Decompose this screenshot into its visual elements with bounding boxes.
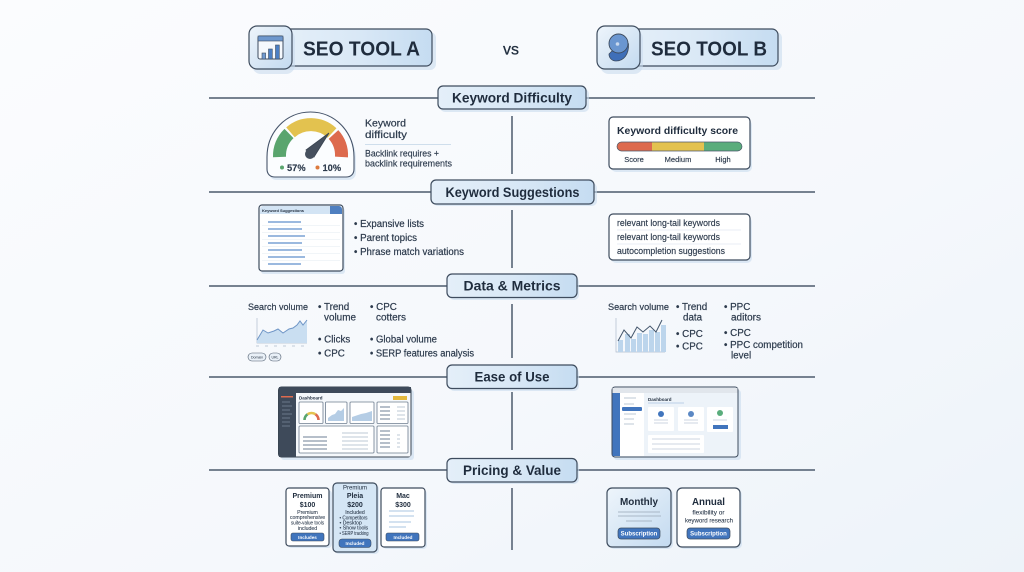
heading: Data & Metrics <box>447 274 579 300</box>
label: SEO TOOL A <box>303 38 420 60</box>
card: Plete <box>333 483 379 554</box>
card: Mac: $300 <box>395 502 411 509</box>
metric lists: • PPC competition <box>724 340 803 351</box>
metric lists: volume <box>324 312 357 324</box>
panel: tool B difficulty score: Score <box>624 155 644 164</box>
card: Premium: Premium <box>297 510 318 516</box>
card: Annual: Subscription <box>690 532 727 538</box>
list: tool A suggestions: • Parent topics <box>354 233 417 244</box>
card: Monthly: Monthly <box>620 496 658 508</box>
gauge <box>267 112 356 180</box>
card: Plete: Included <box>346 541 365 546</box>
panel: tool B difficulty score <box>609 117 752 172</box>
metric lists <box>676 302 803 362</box>
gauge: 57% <box>287 163 306 173</box>
metric lists: • Clicks <box>318 334 350 346</box>
list: tool A suggestions <box>354 219 464 258</box>
heading: Keyword Suggestions: Keyword Suggestions <box>446 184 580 200</box>
panel: tool B suggestions list: relevant long-tail keywords <box>617 218 720 228</box>
card: Monthly <box>607 488 673 549</box>
icon: nine shaped logo <box>609 34 629 61</box>
panel: tool B suggestions list <box>609 214 752 263</box>
widgets <box>299 402 408 453</box>
card: Premium <box>286 488 332 548</box>
panel: tool A keyword suggestions list: Keyword Suggestions <box>262 208 305 213</box>
card: Annual <box>677 488 742 549</box>
metric lists: • Global volume <box>370 334 438 346</box>
metric tags: URL <box>271 356 279 360</box>
metric lists: • CPC <box>676 329 703 340</box>
metric lists: • CPC <box>676 342 703 352</box>
metric lists: • CPC <box>724 328 751 339</box>
metric tags: Domain <box>251 356 263 360</box>
panel: tool A gauge <box>267 112 452 180</box>
panel: tool B difficulty score: Keyword difficulty score <box>617 125 738 137</box>
center divider <box>511 116 513 550</box>
panel: tool A keyword suggestions list <box>259 205 345 274</box>
gauge widget <box>304 413 318 420</box>
metric lists: • PPC <box>724 302 750 313</box>
card: Premium: comprehensive <box>290 515 325 521</box>
gauge notes: backlink requirements <box>365 158 452 168</box>
section rules <box>209 98 815 470</box>
metric lists: cotters <box>376 312 406 324</box>
panel: tool B suggestions list: autocompletion suggestions <box>617 246 725 256</box>
gauge notes: difficulty <box>365 130 407 141</box>
card: Mac: Mac <box>396 493 410 500</box>
header: SEO Tool B <box>597 26 782 74</box>
heading: Keyword Suggestions <box>431 180 597 206</box>
metric lists: • SERP features analysis <box>370 348 474 360</box>
metric lists: • Trend <box>676 302 707 313</box>
card: Premium: Premium <box>293 493 322 500</box>
card: Plete: Included <box>345 510 365 516</box>
score bar <box>617 142 742 151</box>
heading: Keyword Difficulty: Keyword Difficulty <box>452 90 572 106</box>
heading: Data & Metrics: Data & Metrics <box>464 278 561 294</box>
cards <box>648 407 733 453</box>
card: Annual: keyword research <box>685 518 733 524</box>
panel: tool A data and metrics: Search volume <box>248 302 308 313</box>
heading: Pricing & Value: Pricing & Value <box>463 462 561 478</box>
panel: tool B suggestions list: relevant long-tail keywords <box>617 232 720 242</box>
card: Premium: suite-value tools <box>291 520 324 526</box>
area chart <box>256 318 307 346</box>
card: Plete: Pleia <box>347 493 363 500</box>
list: tool A suggestions: • Phrase match variations <box>354 247 464 258</box>
gauge notes: Keyword <box>365 118 406 130</box>
combo chart <box>616 318 666 352</box>
card: Annual: Annual <box>692 496 725 508</box>
metric tags <box>248 353 281 361</box>
vs: vs <box>503 42 519 58</box>
heading: Ease of Use <box>447 365 579 391</box>
heading: Ease of Use: Ease of Use <box>474 368 550 384</box>
card: Plete: Premium <box>343 486 367 492</box>
gauge notes: Backlink requires + <box>365 148 439 158</box>
panel: tool B dashboard screenshot <box>612 387 741 460</box>
panel: tool A dashboard screenshot <box>278 387 414 460</box>
card: Plete: • Show tools <box>340 526 369 532</box>
metric lists: data <box>683 312 703 324</box>
icon: dashboard bars <box>258 36 283 59</box>
panel: tool B dashboard screenshot: Dashboard <box>648 397 672 402</box>
card: Premium: Includes <box>298 535 317 540</box>
panel: tool A data and metrics <box>248 302 474 361</box>
card: Premium: $100 <box>300 502 315 509</box>
header: SEO Tool A <box>249 26 436 74</box>
metric lists: • CPC <box>318 348 345 360</box>
metric lists: • Trend <box>318 302 349 313</box>
card: Plete: • SERP tracking <box>340 531 369 537</box>
card: Mac <box>381 488 427 549</box>
label: SEO TOOL B <box>651 38 767 60</box>
metric lists <box>318 302 474 360</box>
heading: Pricing & Value <box>447 458 579 484</box>
card: Monthly: Subscription <box>621 532 658 538</box>
card: Premium: included <box>298 526 317 532</box>
panel: tool B difficulty score: Medium <box>665 155 691 164</box>
gauge: 10% <box>322 163 342 173</box>
card: Plete: $200 <box>347 502 363 509</box>
metric lists: level <box>731 350 751 362</box>
card: Annual: flexibility or <box>692 510 725 516</box>
card: Plete: • Desktop <box>340 520 362 526</box>
list rows <box>268 222 305 264</box>
gauge notes <box>365 118 452 168</box>
list: tool A suggestions: • Expansive lists <box>354 219 424 230</box>
panel: tool B difficulty score: High <box>715 155 731 164</box>
panel: tool A dashboard screenshot: Dashboard <box>299 396 323 400</box>
panel: tool A pricing cards <box>286 483 427 554</box>
heading: Keyword Difficulty <box>438 86 589 112</box>
panel: tool B data and metrics: Search volume <box>608 302 669 313</box>
card: Mac: Included <box>394 535 413 540</box>
metric lists: • CPC <box>370 302 397 313</box>
metric lists: aditors <box>731 312 761 324</box>
panel: tool B data and metrics <box>608 302 803 362</box>
card: Plete: • Competitors <box>340 516 368 522</box>
panel: tool B pricing cards <box>607 488 742 549</box>
bar widgets <box>328 408 344 421</box>
